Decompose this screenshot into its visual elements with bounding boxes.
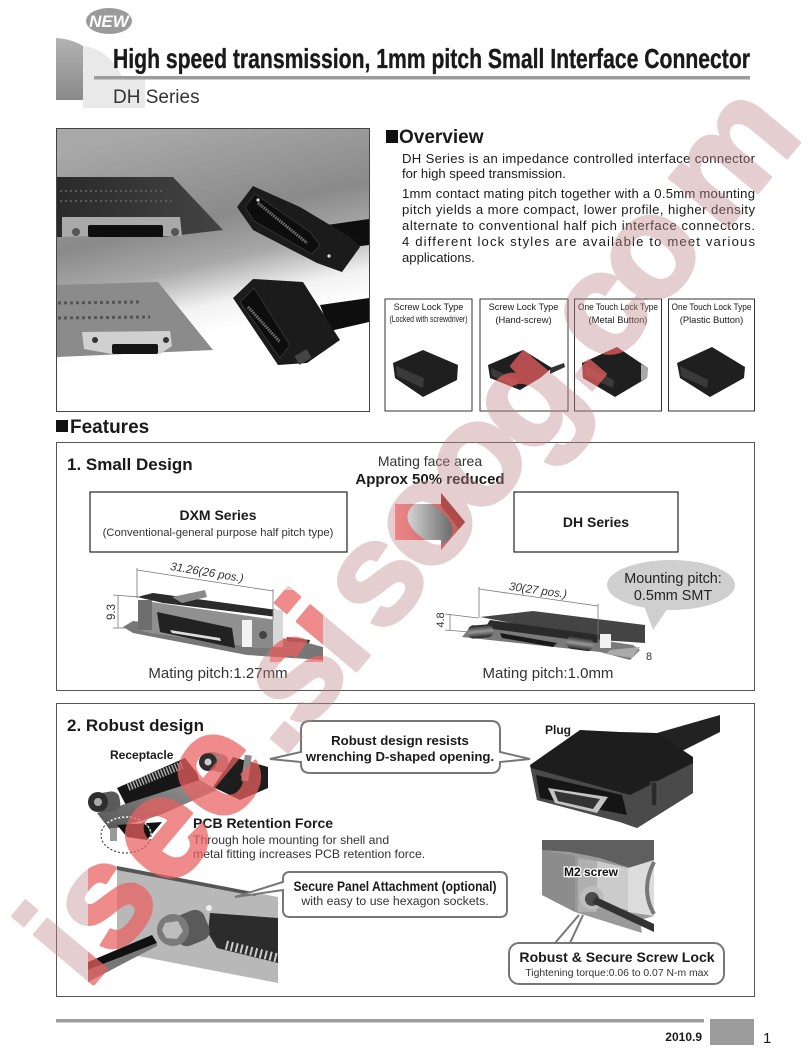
panel: small design [56,442,754,690]
callout: mounting pitch: Mounting pitch: [624,571,722,587]
overview paragraph: 1mm contact mating pitch together with a 0.5mm mounting [402,186,755,201]
label: M2 screw: M2 screw [564,865,619,879]
callout: robust design resists: Robust design resists [331,733,469,748]
drawing: panel and hex socket [88,866,278,983]
drawing: DH connector [462,611,645,660]
dimension: 31.26: 31.26(26 pos.) [169,561,245,585]
panel: lock type 3: (Metal Button) [589,314,647,325]
marker: dashed ellipse [101,817,151,853]
caption: DXM mating pitch: Mating pitch:1.27mm [148,665,288,682]
label: plug: Plug [545,723,571,737]
callout: screw lock [509,915,724,984]
dimension: 30 [479,581,598,650]
panel: robust design [56,704,754,996]
panel: lock type 2 [480,299,568,411]
dimension: 30: 30(27 pos.) [508,581,568,601]
box: DH series [514,492,678,552]
drawing: plug [530,715,720,828]
text: PCB retention: PCB Retention Force [193,815,333,831]
panel: lock type 4 [668,299,754,411]
dimension: 8: 8 [646,651,652,663]
callout: mounting pitch: 0.5mm SMT [634,588,712,604]
overview paragraph: 4 different lock styles are available to meet various [402,234,755,249]
dimension: 4.8: 4.8 [435,612,447,628]
overview paragraph: pitch yields a more compact, lower profile, higher density [402,202,755,217]
overview paragraph [402,151,756,265]
callout: screw lock: Tightening torque:0.06 to 0.07 N-m max [525,968,709,979]
overview heading: Overview [399,127,484,148]
dimension: 9.3 [106,595,140,628]
drawing: DXM connector [123,590,323,660]
badge: NEW: NEW [89,12,131,31]
mating face note [355,453,505,488]
heading: small design: 1. Small Design [67,455,193,474]
dimension: 9.3: 9.3 [106,604,118,620]
overview paragraph: for high speed transmission. [402,166,566,181]
mating face note: Mating face area [378,453,482,469]
panel: lock type 4: One Touch Lock Type [672,302,752,312]
callout: panel attachment [235,872,507,917]
header decoration [56,38,750,108]
subtitle: DH Series [113,87,200,108]
footer: 1 [763,1030,771,1047]
panel: lock type 1: (Locked with screwdriver) [390,314,468,324]
box: DH series: DH Series [563,514,629,530]
text: PCB retention: metal fitting increases PCB retention force. [193,847,425,861]
callout: panel attachment: Secure Panel Attachment (optional) [294,879,496,894]
box: DXM series: DXM Series [179,507,257,523]
overview paragraph: DH Series is an impedance controlled interface connector [402,151,756,166]
overview paragraph: alternate to conventional half pich interface connectors. [402,218,755,233]
dimension: 4.8 [435,612,478,632]
callout: screw lock: Robust & Secure Screw Lock [519,949,715,965]
text: PCB retention [193,815,425,861]
footer: 2010.9 [665,1030,702,1044]
product photo [56,128,370,412]
callout: robust design resists: wrenching D-shaped opening. [305,749,494,764]
label: receptacle: Receptacle [110,748,174,762]
photo: M2 screw [542,840,654,933]
arrow [395,493,465,550]
overview paragraph: applications. [402,250,475,265]
badge: NEW [86,8,132,34]
box: DXM series [90,492,347,552]
dimension: 31.26 [137,561,273,620]
panel: lock type 2: (Hand-screw) [495,314,552,325]
panel: lock type 2: Screw Lock Type [489,302,558,312]
callout: robust design resists [270,721,530,773]
heading: robust design: 2. Robust design [67,716,204,735]
caption: DH mating pitch: Mating pitch:1.0mm [483,665,613,682]
box: DXM series: (Conventional-general purpose half pitch type) [103,527,334,539]
callout: panel attachment: with easy to use hexagon sockets. [300,894,489,908]
drawing: receptacle [88,750,268,841]
callout: mounting pitch [607,560,735,630]
panel: lock type 3: One Touch Lock Type [578,302,658,312]
mating face note: Approx 50% reduced [355,471,505,488]
footer [56,1019,771,1047]
text: PCB retention: Through hole mounting for shell and [193,833,389,847]
panel: lock type 1: Screw Lock Type [394,302,463,312]
panel: lock type 3 [574,299,662,411]
features heading: Features [70,417,149,438]
panel: lock type 1 [385,299,472,411]
panel: lock type 4: (Plastic Button) [680,314,743,325]
